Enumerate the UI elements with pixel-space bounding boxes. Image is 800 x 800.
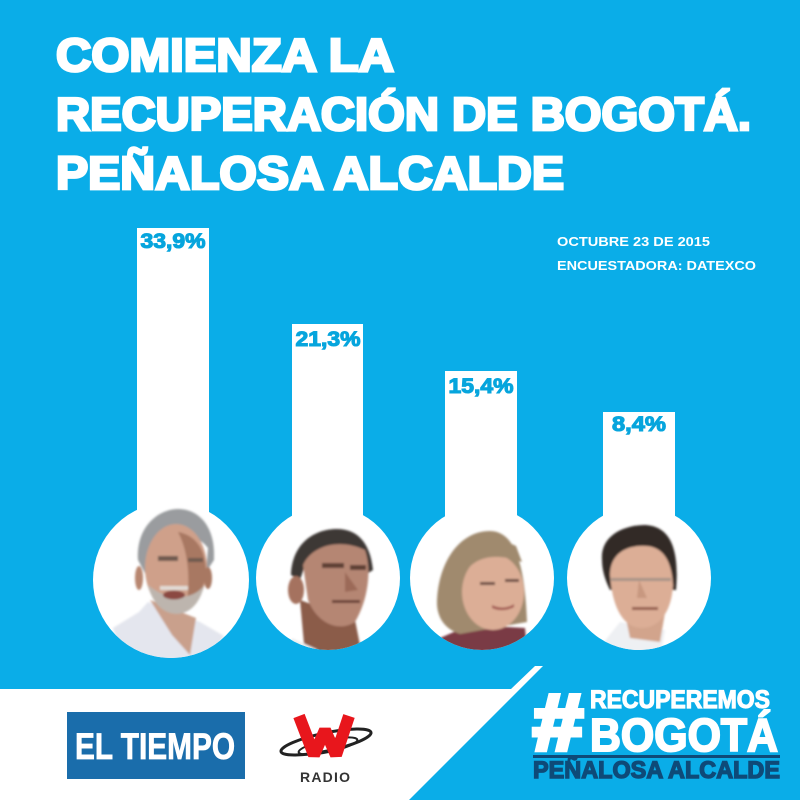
bar: Peñalosa 33,9%: 33,9% xyxy=(140,230,206,253)
campaign logo: #RecuperemosBogotá: PEÑALOSA ALCALDE xyxy=(533,756,780,784)
title: PEÑALOSA ALCALDE xyxy=(56,147,564,199)
title xyxy=(56,29,751,199)
portrait: man with grey hair xyxy=(113,509,224,665)
title: RECUPERACIÓN DE BOGOTÁ. xyxy=(56,88,751,140)
logo: El Tiempo: EL TIEMPO xyxy=(75,726,235,767)
bar: Peñalosa 33,9% xyxy=(93,228,249,658)
bar: Pardo 8,4% xyxy=(567,412,711,650)
campaign logo: #RecuperemosBogotá: RECUPEREMOS xyxy=(590,686,770,714)
bar: Galán 21,3% xyxy=(256,324,400,650)
campaign logo: #RecuperemosBogotá xyxy=(533,678,780,784)
bar chart xyxy=(93,228,711,658)
bar: Galán 21,3%: 21,3% xyxy=(296,328,361,351)
portrait: man with dark hair xyxy=(288,529,373,655)
footer white band xyxy=(0,666,543,800)
title: COMIENZA LA xyxy=(56,29,394,81)
logo: El Tiempo xyxy=(67,712,245,779)
logo: W Radio: RADIO xyxy=(300,769,350,785)
source note xyxy=(557,234,756,273)
bar: López 15,4% xyxy=(410,371,554,650)
portrait: woman with blonde hair xyxy=(437,531,528,660)
source note: ENCUESTADORA: DATEXCO xyxy=(557,258,756,273)
logo: W Radio xyxy=(279,716,373,785)
portrait: man with glasses xyxy=(602,525,677,660)
campaign logo: #RecuperemosBogotá: # xyxy=(533,678,583,767)
campaign logo: #RecuperemosBogotá: BOGOTÁ xyxy=(590,709,778,761)
bar: López 15,4%: 15,4% xyxy=(448,375,514,398)
bar: Pardo 8,4%: 8,4% xyxy=(612,413,666,436)
source note: OCTUBRE 23 DE 2015 xyxy=(557,234,710,249)
